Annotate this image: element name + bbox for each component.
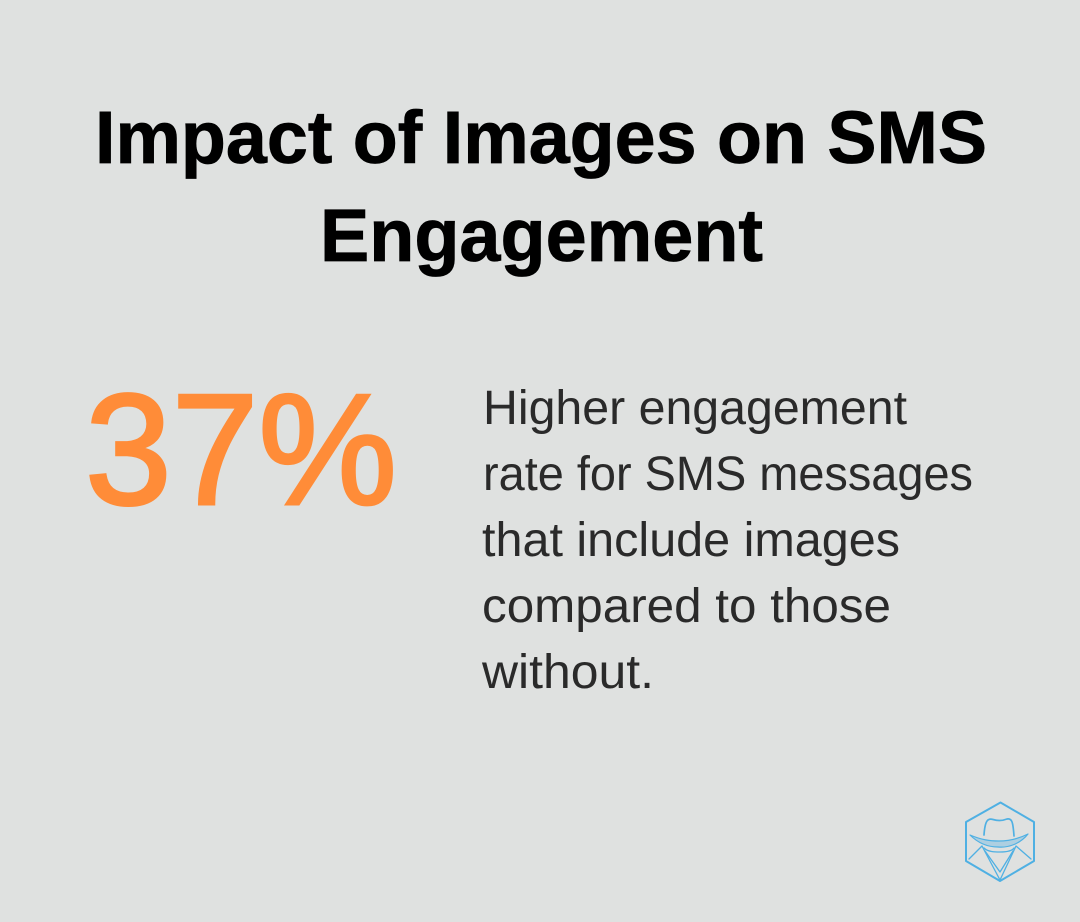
description text: Higher engagement xyxy=(483,382,907,435)
big statistic: 37%: 37% xyxy=(85,362,397,538)
description text: rate for SMS messages xyxy=(483,448,973,501)
title: Engagement xyxy=(320,194,763,277)
description text xyxy=(481,382,973,699)
title xyxy=(95,96,987,277)
description text: compared to those xyxy=(482,580,891,633)
description text: that include images xyxy=(482,514,900,567)
icon: hexagon spy logo xyxy=(966,802,1034,881)
description text: without. xyxy=(481,646,654,699)
title: Impact of Images on SMS xyxy=(95,96,987,179)
